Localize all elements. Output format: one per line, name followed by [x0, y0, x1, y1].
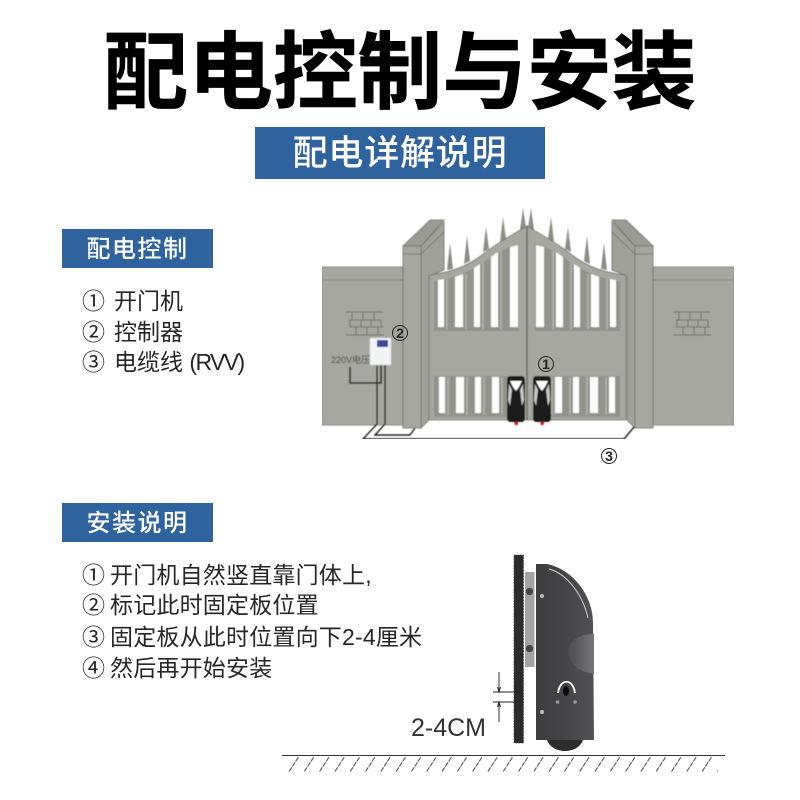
lock and arc	[540, 594, 577, 714]
wiring legend list	[82, 288, 244, 375]
step 1: ①	[82, 562, 105, 588]
legend item 3: 电缆线 (RVV)	[114, 349, 244, 375]
section label: installation	[62, 503, 213, 542]
step 3: ③	[82, 624, 105, 650]
section label: installation: 安装说明	[86, 510, 188, 537]
left pillar	[403, 220, 444, 428]
legend item 2	[82, 319, 183, 345]
gate motors	[507, 376, 551, 425]
marker 2	[392, 325, 408, 341]
banner heading: wiring details: 配电详解说明	[293, 134, 507, 173]
step 1: 开门机自然竖直靠门体上,	[110, 562, 372, 588]
step 4: ④	[82, 655, 105, 681]
right wall	[653, 267, 734, 425]
gate leaf left	[428, 208, 527, 420]
marker 2: 2	[396, 325, 404, 341]
legend item 2: 控制器	[114, 319, 183, 345]
legend item 1: ①	[82, 288, 105, 314]
legend item 1: 开门机	[114, 288, 183, 314]
brick pattern right	[673, 312, 711, 335]
marker 1: 1	[542, 356, 550, 372]
controller box	[370, 338, 391, 365]
legend item 3: ③	[82, 349, 105, 375]
gate leaf right	[527, 208, 626, 420]
opener wheel	[547, 740, 583, 751]
installation steps list	[82, 562, 422, 681]
gate scene	[322, 208, 734, 439]
step 3: 固定板从此时位置向下2-4厘米	[110, 624, 422, 650]
ground line with hatching	[282, 756, 725, 772]
brick pattern left	[346, 312, 384, 335]
center post line	[526, 226, 528, 420]
banner heading: wiring details	[255, 127, 545, 179]
mounting plate	[525, 572, 534, 667]
legend item 2: ②	[82, 319, 105, 345]
section label: wiring control: 配电控制	[86, 236, 188, 263]
step 2: ②	[82, 592, 105, 618]
opener body	[536, 564, 594, 740]
dome highlight	[549, 569, 588, 618]
dimension lines	[493, 672, 523, 722]
marker 3: 3	[605, 448, 613, 464]
section label: wiring control	[62, 229, 213, 268]
door wall section	[514, 555, 524, 743]
title: 配电控制与安装	[104, 26, 696, 120]
legend item 1	[82, 288, 183, 314]
step 4: 然后再开始安装	[110, 655, 272, 681]
marker 3	[602, 448, 616, 464]
dimension label: 2-4CM	[411, 714, 486, 742]
wiring cables	[350, 365, 634, 439]
voltage label: 220V电压	[331, 354, 370, 365]
step 2: 标记此时固定板位置	[110, 592, 319, 618]
marker 1	[538, 356, 554, 372]
right pillar	[612, 220, 653, 428]
left wall	[322, 267, 403, 425]
